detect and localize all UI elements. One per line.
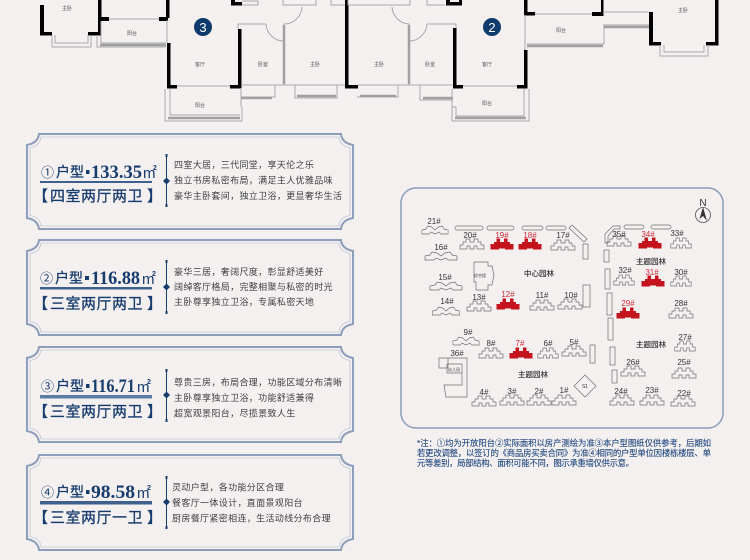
building 14 bbox=[432, 297, 460, 315]
floor plan bbox=[40, 0, 718, 121]
garden labels: 主题园林 bbox=[636, 339, 666, 349]
building 33 bbox=[670, 229, 691, 248]
unit 3 area heading: 户型 bbox=[56, 378, 84, 394]
building 9: 9# bbox=[464, 328, 473, 337]
unit 1 area heading: ① bbox=[41, 165, 54, 180]
building 25 bbox=[672, 358, 696, 378]
building 6 bbox=[538, 339, 558, 358]
building 4: 4# bbox=[480, 388, 489, 397]
unit 4 description bbox=[172, 482, 331, 524]
unit 3 large balcony bbox=[165, 88, 242, 121]
building 8: 8# bbox=[487, 339, 496, 348]
building 6: 6# bbox=[544, 339, 553, 348]
unit 4 divider bbox=[163, 476, 170, 529]
footnote: 若更改调整，以签订的《商品房买卖合同》为准④相同的户型单位因楼栋楼层、单 bbox=[417, 448, 711, 458]
footnote bbox=[417, 438, 711, 468]
unit 4 rule bbox=[40, 501, 152, 504]
building 21 bbox=[422, 217, 448, 234]
unit 1 area heading bbox=[41, 162, 157, 183]
unit 3 area heading: m bbox=[137, 379, 150, 396]
unit 3 living room walls bbox=[167, 0, 242, 88]
building 27 bbox=[675, 333, 695, 351]
building 25: 25# bbox=[677, 358, 691, 367]
building 12: 12# bbox=[501, 290, 515, 299]
unit 3 bedrooms bbox=[238, 0, 345, 98]
building 26: 26# bbox=[626, 358, 640, 367]
unit 1 room type: 四室两厅两卫 bbox=[50, 188, 143, 205]
unit 2 living room walls: 客厅 bbox=[482, 61, 492, 68]
unit 2 bedrooms bbox=[348, 0, 456, 100]
unit 4 description: 厨房餐厅紧密相连，生活动线分布合理 bbox=[172, 512, 331, 524]
building 29: 29# bbox=[621, 299, 635, 308]
unit 2 room type: 三室两厅两卫 bbox=[50, 296, 143, 312]
unit 2 rule bbox=[40, 287, 152, 290]
unit 2 area heading bbox=[40, 268, 156, 289]
unit 1 area heading: m bbox=[143, 165, 156, 182]
building 23 bbox=[640, 386, 664, 405]
building 16 bbox=[425, 243, 457, 260]
building 21: 21# bbox=[427, 217, 441, 226]
unit 4 area heading: ④ bbox=[41, 485, 54, 500]
unit 2 area heading: 户型 bbox=[55, 270, 83, 286]
building 7 bbox=[510, 339, 532, 358]
unit 3 room type: 【 bbox=[33, 404, 49, 420]
building 4 bbox=[472, 388, 496, 406]
unit 2 living room walls bbox=[446, 0, 535, 88]
building 11 bbox=[530, 291, 554, 310]
building 35 bbox=[607, 230, 631, 246]
building 24: 24# bbox=[614, 387, 628, 396]
unit 2 area heading: m bbox=[142, 271, 154, 288]
unit 3 divider bbox=[163, 369, 170, 422]
unit 1 area heading: 户型 bbox=[56, 164, 84, 180]
unit 3 area heading: 116.71 bbox=[91, 376, 135, 397]
building 8 bbox=[479, 339, 503, 358]
building 2: 2# bbox=[535, 387, 544, 396]
unit 1 rule bbox=[40, 181, 152, 183]
building 15: 15# bbox=[438, 273, 452, 282]
building 26 bbox=[621, 358, 645, 376]
icon: north compass bbox=[696, 198, 710, 222]
building 32: 32# bbox=[618, 266, 632, 275]
unit 1 room type: 【 bbox=[33, 188, 49, 205]
building 18 bbox=[518, 231, 542, 250]
icon: north compass: N bbox=[699, 198, 707, 209]
unit 2 description: 阔绰客厅格局，完整相聚与私密的时光 bbox=[174, 281, 333, 292]
unit 4 room type: 】 bbox=[147, 510, 163, 526]
building 35: 35# bbox=[612, 230, 626, 239]
building 5: 5# bbox=[570, 338, 579, 347]
building 16: 16# bbox=[434, 243, 448, 252]
unit 2 bedrooms: 主卧 bbox=[374, 61, 384, 68]
left balcony: 阳台 bbox=[127, 30, 137, 37]
building 22: 22# bbox=[677, 389, 691, 398]
garden labels: 中心园林 bbox=[524, 268, 554, 278]
building 28: 28# bbox=[674, 299, 688, 308]
building 20: 20# bbox=[463, 231, 477, 240]
building 20 bbox=[460, 231, 484, 249]
clubhouse: 综合楼 bbox=[474, 272, 486, 278]
unit 3 bedrooms: 主卧 bbox=[310, 61, 320, 68]
building 5 bbox=[562, 338, 586, 356]
unit 2 room type: 】 bbox=[147, 296, 163, 312]
row buildings bbox=[455, 225, 671, 383]
unit 2 area heading: 2 bbox=[152, 271, 156, 278]
unit 1 area heading: 2 bbox=[153, 165, 157, 172]
unit 3 large balcony: 阳台 bbox=[195, 102, 205, 109]
unit 4 room type: 【 bbox=[33, 510, 49, 526]
building S1 bbox=[574, 375, 596, 397]
building 13: 13# bbox=[472, 293, 486, 302]
building 15 bbox=[430, 273, 462, 290]
unit 1 description: 四室大居，三代同堂，享天伦之乐 bbox=[174, 159, 314, 170]
unit 3 description: 主卧尊享独立卫浴，功能舒适兼得 bbox=[174, 392, 314, 403]
building 31: 31# bbox=[645, 268, 659, 277]
building 3: 3# bbox=[508, 387, 517, 396]
unit 3 living room walls: 客厅 bbox=[195, 61, 205, 68]
unit 3 description: 尊贵三房，布局合理，功能区域分布清晰 bbox=[174, 376, 342, 388]
panel: unit 1 bbox=[27, 134, 353, 229]
building 28 bbox=[669, 299, 693, 318]
unit 1 description: 独立书房私密布局，满足主人优雅品味 bbox=[174, 174, 333, 186]
unit 2 room type: 【 bbox=[33, 296, 49, 312]
building 36 and kindergarten: 36# bbox=[450, 349, 464, 358]
right balcony: 阳台 bbox=[556, 27, 566, 34]
building 2 bbox=[527, 387, 551, 405]
unit 3 description: 超宽观景阳台，尽揽景致人生 bbox=[174, 408, 296, 418]
unit 2 area heading: ② bbox=[40, 271, 53, 286]
unit 3 badge: 3 bbox=[199, 20, 207, 35]
left balcony bbox=[97, 0, 170, 47]
unit 2 description bbox=[174, 266, 333, 307]
unit 4 area heading bbox=[41, 482, 151, 503]
panel: unit 3 bbox=[27, 347, 353, 442]
building 7: 7# bbox=[516, 339, 525, 348]
unit 3 description bbox=[174, 376, 342, 418]
unit 4 area heading: m bbox=[137, 485, 150, 502]
building 32 bbox=[614, 266, 634, 285]
unit 1 description: 豪华主卧套间，独立卫浴，更显奢华生活 bbox=[174, 190, 342, 201]
building 1: 1# bbox=[560, 386, 569, 395]
unit 1 area heading: 133.35 bbox=[91, 162, 142, 183]
unit 4 description: 灵动户型，各功能分区合理 bbox=[172, 482, 284, 492]
unit 3 area heading: ③ bbox=[41, 379, 54, 394]
building 34 bbox=[638, 230, 662, 248]
building 10: 10# bbox=[564, 291, 578, 300]
footnote: *注：①均为开放阳台②实际面积以房产测绘为准③本户型图纸仅供参考，后期如 bbox=[417, 438, 711, 448]
building 12 bbox=[496, 290, 520, 310]
panel: site map bbox=[401, 188, 723, 428]
unit 4 description: 餐客厅一体设计，直面景观阳台 bbox=[172, 497, 303, 508]
unit 1 divider bbox=[163, 154, 170, 207]
building 24 bbox=[610, 387, 634, 405]
unit 3 bedrooms: 卧室 bbox=[258, 61, 268, 68]
building S1: S1 bbox=[582, 384, 588, 390]
unit 3 area heading: 2 bbox=[147, 379, 151, 386]
building 18: 18# bbox=[523, 231, 537, 240]
unit 1 room type: 】 bbox=[147, 188, 163, 205]
unit 2 area heading: 116.88 bbox=[91, 268, 140, 289]
building 29 bbox=[616, 299, 640, 318]
building 30: 30# bbox=[674, 268, 688, 277]
left unit master bedroom walls: 主卧 bbox=[62, 5, 72, 12]
unit 4 area heading: 98.58 bbox=[91, 482, 135, 503]
left unit master bedroom walls bbox=[40, 0, 102, 47]
garden labels: 主题园林 bbox=[518, 369, 548, 379]
building 17 bbox=[551, 231, 575, 250]
building 11: 11# bbox=[536, 291, 549, 300]
centre party wall bbox=[345, 0, 358, 88]
unit 2 large balcony bbox=[452, 89, 529, 121]
right balcony bbox=[527, 0, 649, 46]
panel: unit 2 bbox=[27, 240, 353, 335]
building 14: 14# bbox=[440, 297, 454, 306]
unit 2 badge bbox=[483, 18, 501, 36]
unit 4 area heading: 户型 bbox=[56, 484, 84, 500]
building 30 bbox=[671, 268, 691, 286]
building 10 bbox=[558, 291, 582, 309]
unit 2 description: 豪华三居，奢阔尺度，彰显舒适美好 bbox=[174, 266, 324, 277]
unit 2 bedrooms: 卧室 bbox=[425, 61, 435, 68]
building 36 and kindergarten bbox=[439, 349, 467, 397]
unit 2 divider bbox=[163, 260, 170, 314]
building 13 bbox=[467, 293, 491, 311]
right unit master bedroom walls bbox=[649, 0, 718, 56]
building 36 and kindergarten: 幼儿园 bbox=[448, 366, 460, 372]
building 3 bbox=[500, 387, 524, 405]
unit 3 rule bbox=[40, 395, 152, 398]
building 34: 34# bbox=[641, 230, 655, 239]
unit 4 area heading: 2 bbox=[147, 485, 151, 492]
building 27: 27# bbox=[678, 333, 692, 342]
unit 2 badge: 2 bbox=[488, 20, 496, 35]
unit 4 room type: 三室两厅一卫 bbox=[50, 510, 143, 526]
unit 3 room type: 】 bbox=[147, 404, 163, 420]
building 1 bbox=[552, 386, 576, 405]
building 9 bbox=[453, 328, 479, 345]
building 22 bbox=[671, 389, 695, 406]
unit 3 area heading bbox=[41, 376, 151, 397]
garden labels bbox=[518, 256, 666, 379]
building 33: 33# bbox=[670, 229, 684, 238]
unit 3 room type: 三室两厅两卫 bbox=[50, 404, 143, 420]
panel: unit 4 bbox=[27, 455, 353, 550]
building 23: 23# bbox=[645, 386, 659, 395]
unit 2 large balcony: 阳台 bbox=[482, 100, 492, 107]
building 19: 19# bbox=[495, 231, 509, 240]
unit 1 description bbox=[174, 159, 342, 201]
building 31 bbox=[642, 268, 664, 286]
building 17: 17# bbox=[556, 231, 570, 240]
building 19 bbox=[490, 231, 514, 250]
right unit master bedroom walls: 主卧 bbox=[678, 7, 688, 14]
unit 3 badge bbox=[194, 18, 212, 36]
footnote: 元等差别，局部结构、面积可能不同，图示承重墙仅供示意。 bbox=[417, 458, 634, 468]
clubhouse bbox=[474, 262, 494, 290]
garden labels: 主题园林 bbox=[636, 256, 666, 266]
unit 2 description: 主卧尊享独立卫浴，专属私密天地 bbox=[174, 296, 314, 307]
